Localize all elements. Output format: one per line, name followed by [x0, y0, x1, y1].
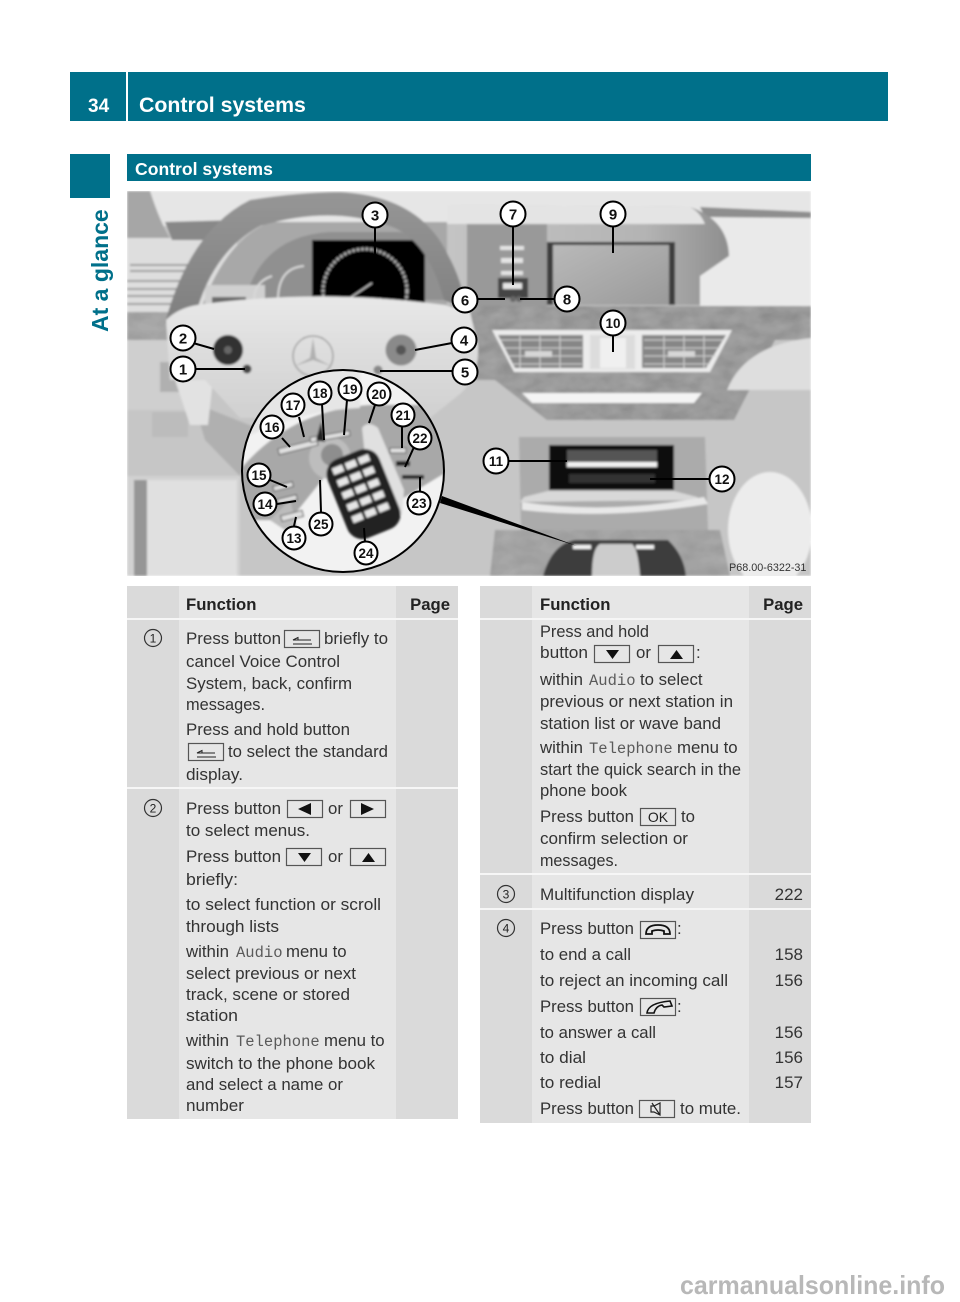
- zoom pointer wedge: [440, 496, 577, 546]
- callout 16: 16: [264, 420, 280, 435]
- function text continued for item 2: messages.: [540, 851, 618, 870]
- function rows for item 4: to dial: [540, 1048, 586, 1067]
- function text for item 2: briefly:: [186, 870, 238, 889]
- function text continued for item 2: to: [681, 807, 695, 826]
- function text for item 2: to select function or scroll: [186, 895, 381, 914]
- callout 24: 24: [358, 546, 374, 561]
- callout 12: [710, 466, 734, 492]
- left table header: [186, 595, 450, 614]
- function text continued for item 2: Press and hold: [540, 622, 649, 641]
- callout 22: 22: [412, 431, 428, 446]
- callout 14: [254, 492, 276, 516]
- function text for item 2: [185, 799, 386, 1115]
- function text continued for item 2: menu to: [677, 738, 738, 757]
- function rows for item 4: 156: [775, 1048, 803, 1067]
- item 3 row: Multifunction display: [540, 885, 695, 904]
- function buttons: [273, 431, 406, 522]
- callout 7: 7: [509, 206, 517, 224]
- item 3 row: [540, 885, 803, 904]
- item 3 row: 222: [775, 885, 803, 904]
- function rows for item 4: to end a call: [540, 945, 631, 964]
- central display: [547, 242, 675, 305]
- callout 22: [408, 426, 432, 450]
- climate strip: [522, 393, 702, 403]
- callout 19: [338, 378, 362, 400]
- function text continued for item 2: :: [696, 643, 701, 662]
- callout 9: [600, 202, 626, 226]
- sidebar marker block: [70, 154, 110, 198]
- callout 5: 5: [461, 364, 469, 382]
- function text for item 2: select previous or next: [186, 964, 356, 983]
- callout 20: 20: [371, 387, 387, 402]
- callout 4: [452, 328, 476, 352]
- function text for item 1: [186, 629, 388, 784]
- callout 17: [282, 394, 304, 416]
- callout 19: 19: [342, 382, 358, 397]
- header: title bar: Control systems: [139, 93, 306, 117]
- callout 7: [500, 202, 526, 226]
- keypad remote: [325, 448, 402, 541]
- function text for item 2: within: [186, 1031, 229, 1050]
- callout 5: [452, 360, 478, 384]
- function text for item 2: Press button: [186, 799, 281, 818]
- sidebar label: At a glance: At a glance: [87, 209, 113, 332]
- function text for item 2: Audio: [236, 944, 283, 962]
- function rows for item 4: to mute.: [680, 1099, 741, 1118]
- callout 6: [452, 288, 478, 312]
- callout 6: 6: [461, 292, 469, 310]
- function text for item 2: station: [186, 1006, 238, 1025]
- function text continued for item 2: phone book: [540, 781, 628, 800]
- magnified steering column detail: [240, 370, 450, 572]
- callout 25: 25: [313, 517, 329, 532]
- callout 9: 9: [609, 206, 617, 224]
- icon: OK button: OK: [648, 809, 669, 825]
- callout 20: [368, 382, 390, 406]
- right table header: [540, 595, 803, 614]
- function rows for item 4: to reject an incoming call: [540, 971, 728, 990]
- section heading bar: [127, 154, 811, 181]
- vent: [492, 330, 732, 372]
- function rows for item 4: 158: [775, 945, 803, 964]
- function rows for item 4: 156: [775, 1023, 803, 1042]
- function text continued for item 2: Audio: [589, 672, 636, 690]
- function rows for item 4: [540, 919, 803, 1118]
- icon: back button: [284, 630, 320, 648]
- function text continued for item 2: button: [540, 643, 588, 662]
- instrument display: [312, 240, 425, 312]
- function text for item 1: briefly to: [324, 629, 388, 648]
- function text continued for item 2: to select: [640, 670, 703, 689]
- icon: mute button: [640, 1100, 674, 1118]
- function rows for item 4: Press button: [540, 1099, 634, 1118]
- marker 1: 1: [150, 632, 157, 646]
- control stalk: [362, 424, 404, 520]
- icon: down button: [594, 646, 630, 662]
- function text for item 2: within: [186, 942, 229, 961]
- hub: [166, 296, 478, 418]
- dashboard hood: [447, 205, 729, 305]
- function text for item 1: cancel Voice Control: [186, 652, 340, 671]
- function text continued for item 2: or: [636, 643, 651, 662]
- header: page number box: 34: [88, 96, 110, 117]
- function rows for item 4: 157: [775, 1073, 803, 1092]
- marker 4: 4: [503, 922, 510, 936]
- function text continued for item 2: Telephone: [589, 740, 673, 758]
- right table header: Page: [763, 595, 803, 614]
- section heading bar: Control systems: [135, 159, 273, 179]
- marker 1: [144, 630, 162, 646]
- icon: OK button: [640, 808, 676, 826]
- left table: [127, 586, 458, 1119]
- left wheel control: [213, 335, 243, 365]
- callout leader lines: [193, 226, 710, 542]
- function text for item 2: through lists: [186, 917, 279, 936]
- icon: up button: [658, 646, 694, 662]
- left table backgrounds: [127, 586, 458, 1119]
- function text continued for item 2: [539, 622, 741, 870]
- function text for item 2: to select menus.: [186, 821, 310, 840]
- logo: [293, 336, 333, 376]
- function text for item 1: Press button: [186, 629, 281, 648]
- callout 17: 17: [285, 398, 301, 413]
- callout 21: [392, 404, 414, 426]
- callout 21: 21: [395, 408, 411, 423]
- function text continued for item 2: Press button: [540, 807, 634, 826]
- callout 18: 18: [312, 386, 328, 401]
- callout 23: [408, 492, 430, 514]
- function text for item 1: Press and hold button: [186, 720, 350, 739]
- callout 3: 3: [371, 208, 379, 224]
- function text for item 2: menu to: [286, 942, 347, 961]
- callout 10: [600, 310, 626, 336]
- callout 8: 8: [563, 292, 571, 308]
- icon: up button: [350, 848, 386, 866]
- function text continued for item 2: confirm selection or: [540, 829, 688, 848]
- cluster: [202, 220, 453, 306]
- callout 13: 13: [286, 531, 302, 546]
- function text continued for item 2: within: [540, 738, 583, 757]
- function text for item 2: track, scene or stored: [186, 985, 350, 1004]
- lower console: [519, 437, 708, 530]
- ring: [309, 437, 351, 479]
- icon: down button: [286, 848, 322, 866]
- watermark: carmanualsonline.info: [680, 1270, 945, 1300]
- function text continued for item 2: within: [540, 670, 583, 689]
- wood trim: [447, 306, 811, 420]
- callout 1: [170, 356, 196, 382]
- right wheel control: [386, 334, 416, 366]
- function rows for item 4: to answer a call: [540, 1023, 656, 1042]
- function text for item 2: Press button: [186, 847, 281, 866]
- callout 15: [248, 464, 270, 486]
- left table header: Page: [410, 595, 450, 614]
- marker 3: [498, 886, 514, 902]
- function rows for item 4: Press button: [540, 919, 634, 938]
- icon: right button: [350, 800, 386, 818]
- right table header: Function: [540, 595, 610, 614]
- function text for item 2: switch to the phone book: [186, 1054, 376, 1073]
- right table backgrounds: [480, 586, 811, 1123]
- icon: hang up button: [640, 922, 676, 938]
- function text for item 2: or: [328, 847, 343, 866]
- callout 2: 2: [179, 330, 187, 348]
- left table header: Function: [186, 595, 256, 614]
- callout 2: [170, 326, 196, 350]
- callout 15: 15: [251, 468, 267, 483]
- function text continued for item 2: start the quick search in the: [540, 760, 741, 779]
- function text for item 2: or: [328, 799, 343, 818]
- steering wheel rim: [165, 192, 466, 323]
- callout 14: 14: [257, 497, 273, 512]
- marker 4: [498, 920, 514, 936]
- callout 25: [310, 512, 332, 536]
- photo reference code: P68.00-6322-31: [729, 562, 806, 574]
- callout 18: [308, 382, 332, 404]
- callout 11: 11: [489, 454, 504, 469]
- photo: car cockpit with numbered callouts: [127, 191, 812, 588]
- function text for item 1: System, back, confirm: [186, 674, 352, 693]
- function text continued for item 2: station list or wave band: [540, 714, 721, 733]
- marker 3: 3: [503, 888, 510, 902]
- function text for item 2: number: [186, 1096, 244, 1115]
- icon: left button: [288, 800, 322, 818]
- callout 10: 10: [605, 316, 621, 331]
- callout 11: [484, 448, 508, 474]
- callout 1: 1: [179, 362, 187, 378]
- callout 16: [260, 416, 284, 438]
- callout 13: [282, 526, 306, 550]
- function rows for item 4: to redial: [540, 1073, 601, 1092]
- function text for item 2: menu to: [324, 1031, 385, 1050]
- function text for item 2: and select a name or: [186, 1075, 343, 1094]
- callout 23: 23: [411, 496, 427, 511]
- function text for item 1: display.: [186, 765, 243, 784]
- function text continued for item 2: previous or next station in: [540, 692, 733, 711]
- function text for item 2: Telephone: [236, 1033, 320, 1051]
- function text for item 1: to select the standard: [228, 742, 388, 761]
- callout 3: [362, 202, 388, 228]
- icon: pick up button: [640, 998, 676, 1016]
- callout 24: [354, 542, 378, 564]
- function rows for item 4: :: [677, 997, 682, 1016]
- function rows for item 4: :: [677, 919, 682, 938]
- callout 8: [554, 286, 580, 312]
- marker 2: 2: [150, 802, 157, 816]
- marker 2: [144, 800, 162, 816]
- function rows for item 4: Press button: [540, 997, 634, 1016]
- callout 4: 4: [460, 332, 469, 350]
- right table: [480, 586, 811, 1123]
- callout 12: 12: [714, 472, 730, 487]
- header: title bar: [128, 72, 888, 121]
- icon: back button hold: [188, 744, 224, 760]
- function text for item 1: messages.: [186, 695, 265, 714]
- function rows for item 4: 156: [775, 971, 803, 990]
- photo background shapes: [127, 191, 812, 588]
- header: page number box: [70, 72, 126, 121]
